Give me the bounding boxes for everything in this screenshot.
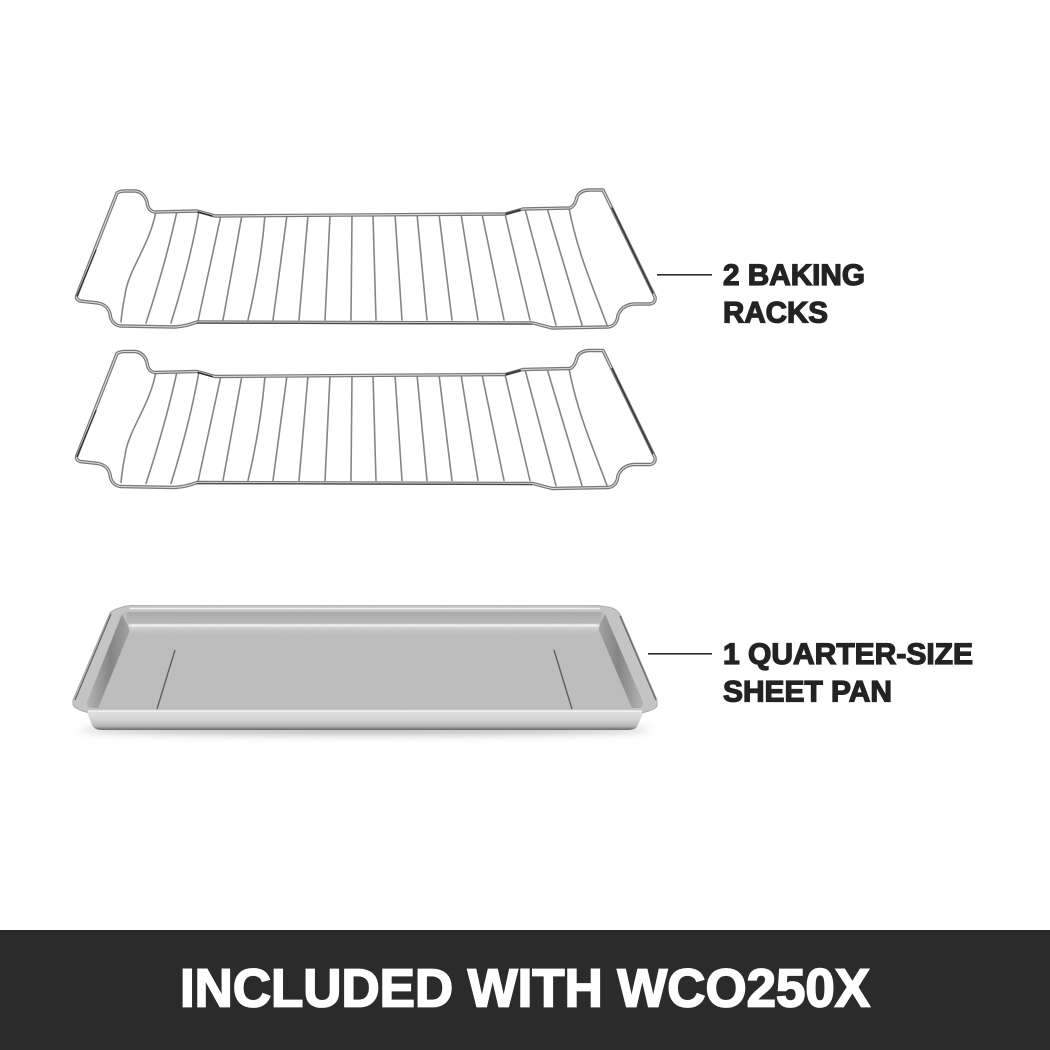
footer banner [0,930,1050,1050]
image: lower baking rack [76,350,655,488]
footer title: INCLUDED WITH WCO250X [180,958,870,1018]
label: 1 quarter-size sheet pan [723,638,973,708]
leader line: sheet pan [648,653,712,655]
image: upper baking rack [76,190,655,328]
leader line: baking racks [657,274,712,276]
label: 2 baking racks: RACKS [723,296,828,330]
label: 2 baking racks [723,259,865,330]
image: quarter-size sheet pan [73,605,657,735]
label: 2 baking racks: 2 BAKING [723,259,865,292]
label: 1 quarter-size sheet pan: SHEET PAN [723,676,892,708]
label: 1 quarter-size sheet pan: 1 QUARTER-SIZE [723,638,973,671]
